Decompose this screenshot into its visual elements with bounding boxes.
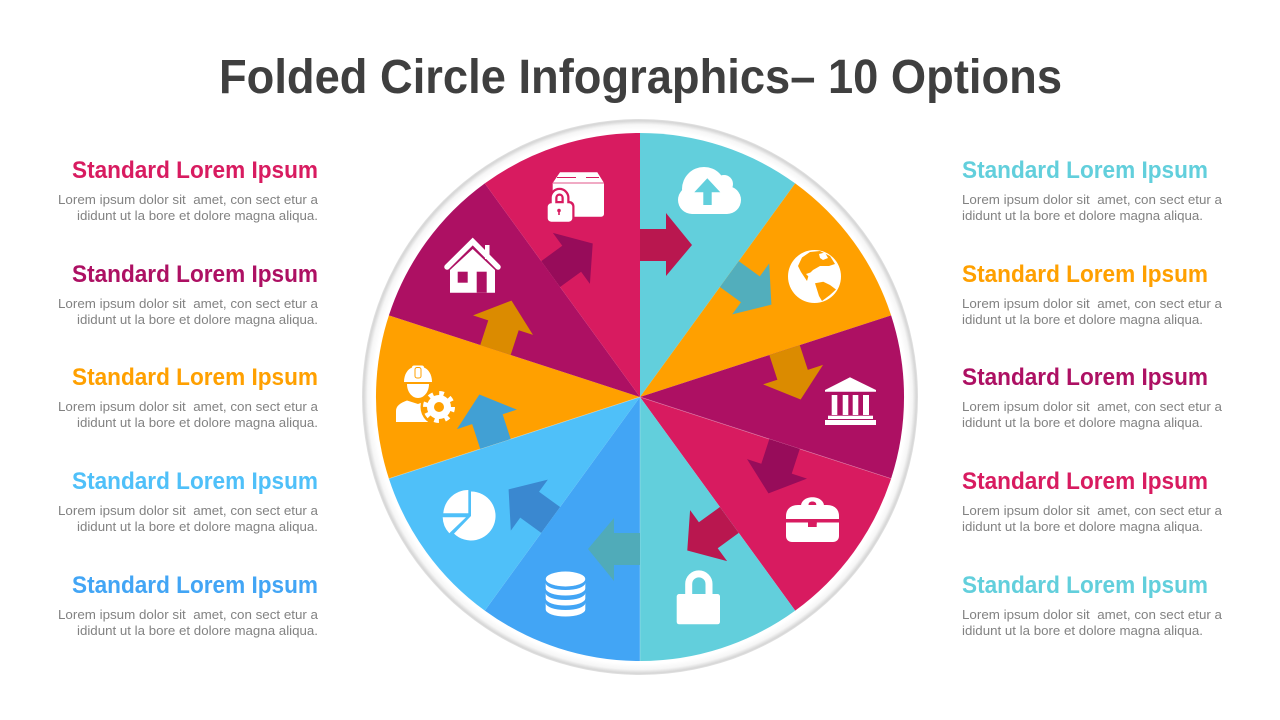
text block: right 1 xyxy=(962,157,1223,223)
icon: cloud upload xyxy=(678,167,741,214)
text block: left 2 xyxy=(58,261,319,327)
text block: right 4: Lorem ipsum dolor sit amet, con sect etur a xyxy=(962,503,1223,518)
text block: right 5: ididunt ut la bore et dolore magna aliqua. xyxy=(962,623,1203,638)
right text column xyxy=(962,157,1223,638)
text block: right 3: Standard Lorem Ipsum xyxy=(962,364,1208,391)
wedges xyxy=(376,133,904,661)
text block: left 4: Standard Lorem Ipsum xyxy=(72,468,318,495)
text block: left 1 xyxy=(58,157,319,223)
icon: globe xyxy=(788,250,841,303)
text block: left 5: Standard Lorem Ipsum xyxy=(72,572,318,599)
text block: left 5: ididunt ut la bore et dolore magna aliqua. xyxy=(77,623,318,638)
text block: right 2 xyxy=(962,261,1223,327)
text block: right 2: ididunt ut la bore et dolore magna aliqua. xyxy=(962,312,1203,327)
icon: house xyxy=(447,242,498,293)
text block: right 5 xyxy=(962,572,1223,638)
text block: left 5: Lorem ipsum dolor sit amet, con sect etur a xyxy=(58,607,319,622)
folded circle diagram xyxy=(362,119,918,675)
icon: pie chart xyxy=(443,490,496,540)
left text column xyxy=(58,157,319,638)
text block: right 3 xyxy=(962,364,1223,430)
text block: left 4: ididunt ut la bore et dolore magna aliqua. xyxy=(77,519,318,534)
text block: left 4: Lorem ipsum dolor sit amet, con sect etur a xyxy=(58,503,319,518)
text block: left 1: ididunt ut la bore et dolore magna aliqua. xyxy=(77,208,318,223)
text block: right 5: Standard Lorem Ipsum xyxy=(962,572,1208,599)
text block: right 4: ididunt ut la bore et dolore magna aliqua. xyxy=(962,519,1203,534)
text block: right 1: ididunt ut la bore et dolore magna aliqua. xyxy=(962,208,1203,223)
icon: padlock xyxy=(677,574,720,624)
icon: toolbox xyxy=(786,497,839,542)
icon: worker with gear xyxy=(396,366,458,426)
text block: right 2: Standard Lorem Ipsum xyxy=(962,261,1208,288)
text block: left 3: Standard Lorem Ipsum xyxy=(72,364,318,391)
text block: left 4 xyxy=(58,468,319,534)
text block: left 5 xyxy=(58,572,319,638)
text block: left 2: Lorem ipsum dolor sit amet, con sect etur a xyxy=(58,296,319,311)
arrows xyxy=(449,213,831,581)
text block: right 3: Lorem ipsum dolor sit amet, con sect etur a xyxy=(962,399,1223,414)
text block: right 1: Lorem ipsum dolor sit amet, con sect etur a xyxy=(962,192,1223,207)
text block: left 3: Lorem ipsum dolor sit amet, con sect etur a xyxy=(58,399,319,414)
text block: left 3 xyxy=(58,364,319,430)
icon: database xyxy=(546,572,585,617)
icon: bank xyxy=(825,377,876,425)
text block: right 3: ididunt ut la bore et dolore magna aliqua. xyxy=(962,415,1203,430)
title: Folded Circle Infographics– 10 Options xyxy=(219,51,1062,104)
text block: right 4 xyxy=(962,468,1223,534)
text block: left 3: ididunt ut la bore et dolore magna aliqua. xyxy=(77,415,318,430)
text block: left 2: ididunt ut la bore et dolore magna aliqua. xyxy=(77,312,318,327)
text block: right 4: Standard Lorem Ipsum xyxy=(962,468,1208,495)
outer ring xyxy=(362,119,918,675)
text block: right 2: Lorem ipsum dolor sit amet, con sect etur a xyxy=(962,296,1223,311)
icon: locked box xyxy=(546,172,604,224)
text block: left 2: Standard Lorem Ipsum xyxy=(72,261,318,288)
text block: right 1: Standard Lorem Ipsum xyxy=(962,157,1208,184)
text block: left 1: Standard Lorem Ipsum xyxy=(72,157,318,184)
text block: left 1: Lorem ipsum dolor sit amet, con sect etur a xyxy=(58,192,319,207)
text block: right 5: Lorem ipsum dolor sit amet, con sect etur a xyxy=(962,607,1223,622)
